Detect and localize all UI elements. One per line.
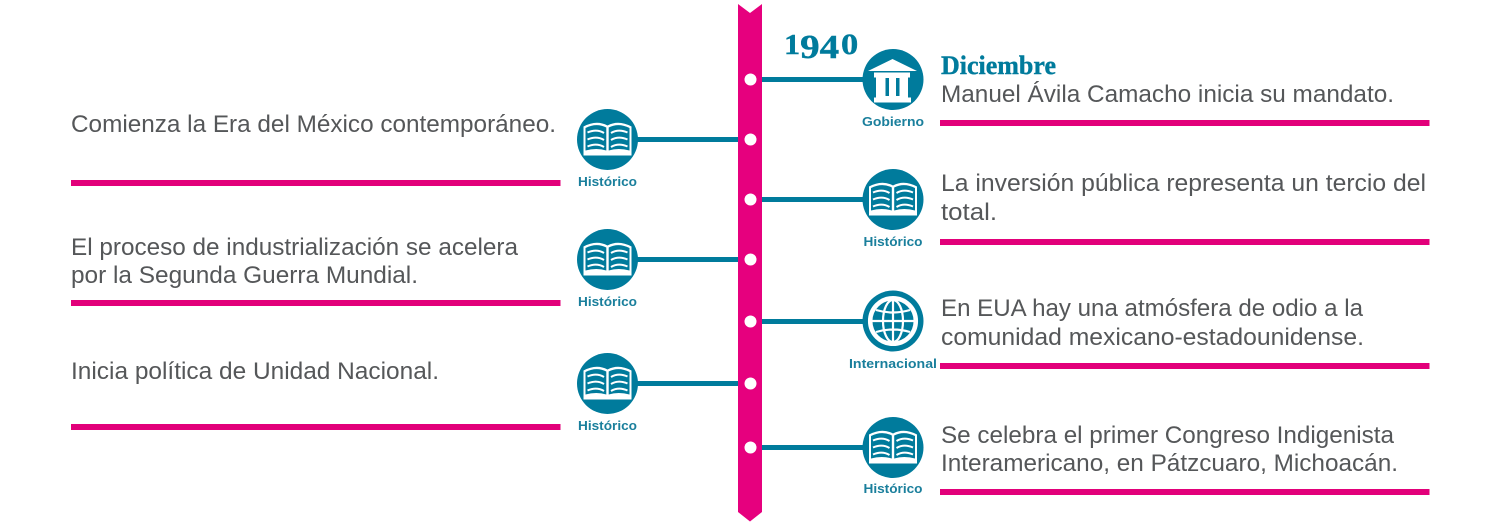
icon: globe	[862, 290, 924, 352]
icon: book	[862, 169, 924, 230]
category label: Histórico	[578, 294, 637, 309]
pink rule	[940, 363, 1430, 369]
event: atmósfera de odio en EUA	[849, 290, 1430, 371]
icon: book	[577, 229, 638, 290]
year heading: 4	[820, 27, 839, 65]
event: proceso de industrialización	[71, 229, 638, 309]
event: proceso de industrialización: por la Segunda Guerra Mundial.	[71, 262, 418, 289]
year heading: 1	[784, 29, 800, 60]
month heading: Diciembre	[941, 51, 1056, 80]
event: Diciembre, Manuel Ávila Camacho	[862, 49, 1430, 129]
connector lines	[635, 77, 866, 450]
event: Congreso Indigenista Interamericano	[862, 417, 1430, 496]
event: inversión pública	[862, 169, 1430, 249]
pink rule	[940, 239, 1430, 245]
icon: book	[577, 109, 638, 170]
category label: Histórico	[864, 234, 923, 249]
icon: book	[862, 417, 924, 478]
pink rule	[71, 424, 560, 430]
event text: Inicia política de Unidad Nacional.	[71, 358, 439, 385]
event: Era del México contemporáneo	[71, 109, 638, 189]
pink rule	[940, 489, 1430, 495]
event text: Manuel Ávila Camacho inicia su mandato.	[941, 81, 1394, 108]
event text: El proceso de industrialización se acelera	[71, 234, 519, 261]
pink rule	[71, 180, 560, 186]
category label: Histórico	[578, 174, 637, 189]
category label: Gobierno	[862, 114, 924, 129]
event: inversión pública: total.	[941, 199, 997, 226]
event: atmósfera de odio en EUA: comunidad mexicano-estadounidense.	[941, 324, 1364, 351]
timeline spine	[738, 4, 762, 522]
event text: Se celebra el primer Congreso Indigenista	[941, 422, 1395, 449]
category label: Internacional	[849, 356, 937, 371]
pink rule	[71, 300, 560, 306]
category label: Histórico	[578, 418, 637, 433]
icon: government building	[862, 49, 924, 110]
event text: En EUA hay una atmósfera de odio a la	[941, 295, 1364, 322]
event: Unidad Nacional	[71, 353, 638, 433]
year heading: 9	[800, 27, 820, 65]
event text: La inversión pública representa un tercio del	[941, 170, 1426, 197]
pink rule	[940, 120, 1430, 126]
category label: Histórico	[864, 481, 923, 496]
event text: Comienza la Era del México contemporáneo.	[71, 111, 556, 138]
year heading: 0	[841, 27, 858, 60]
icon: book	[577, 353, 638, 414]
event: Congreso Indigenista Interamericano: Interamericano, en Pátzcuaro, Michoacán.	[941, 450, 1398, 477]
